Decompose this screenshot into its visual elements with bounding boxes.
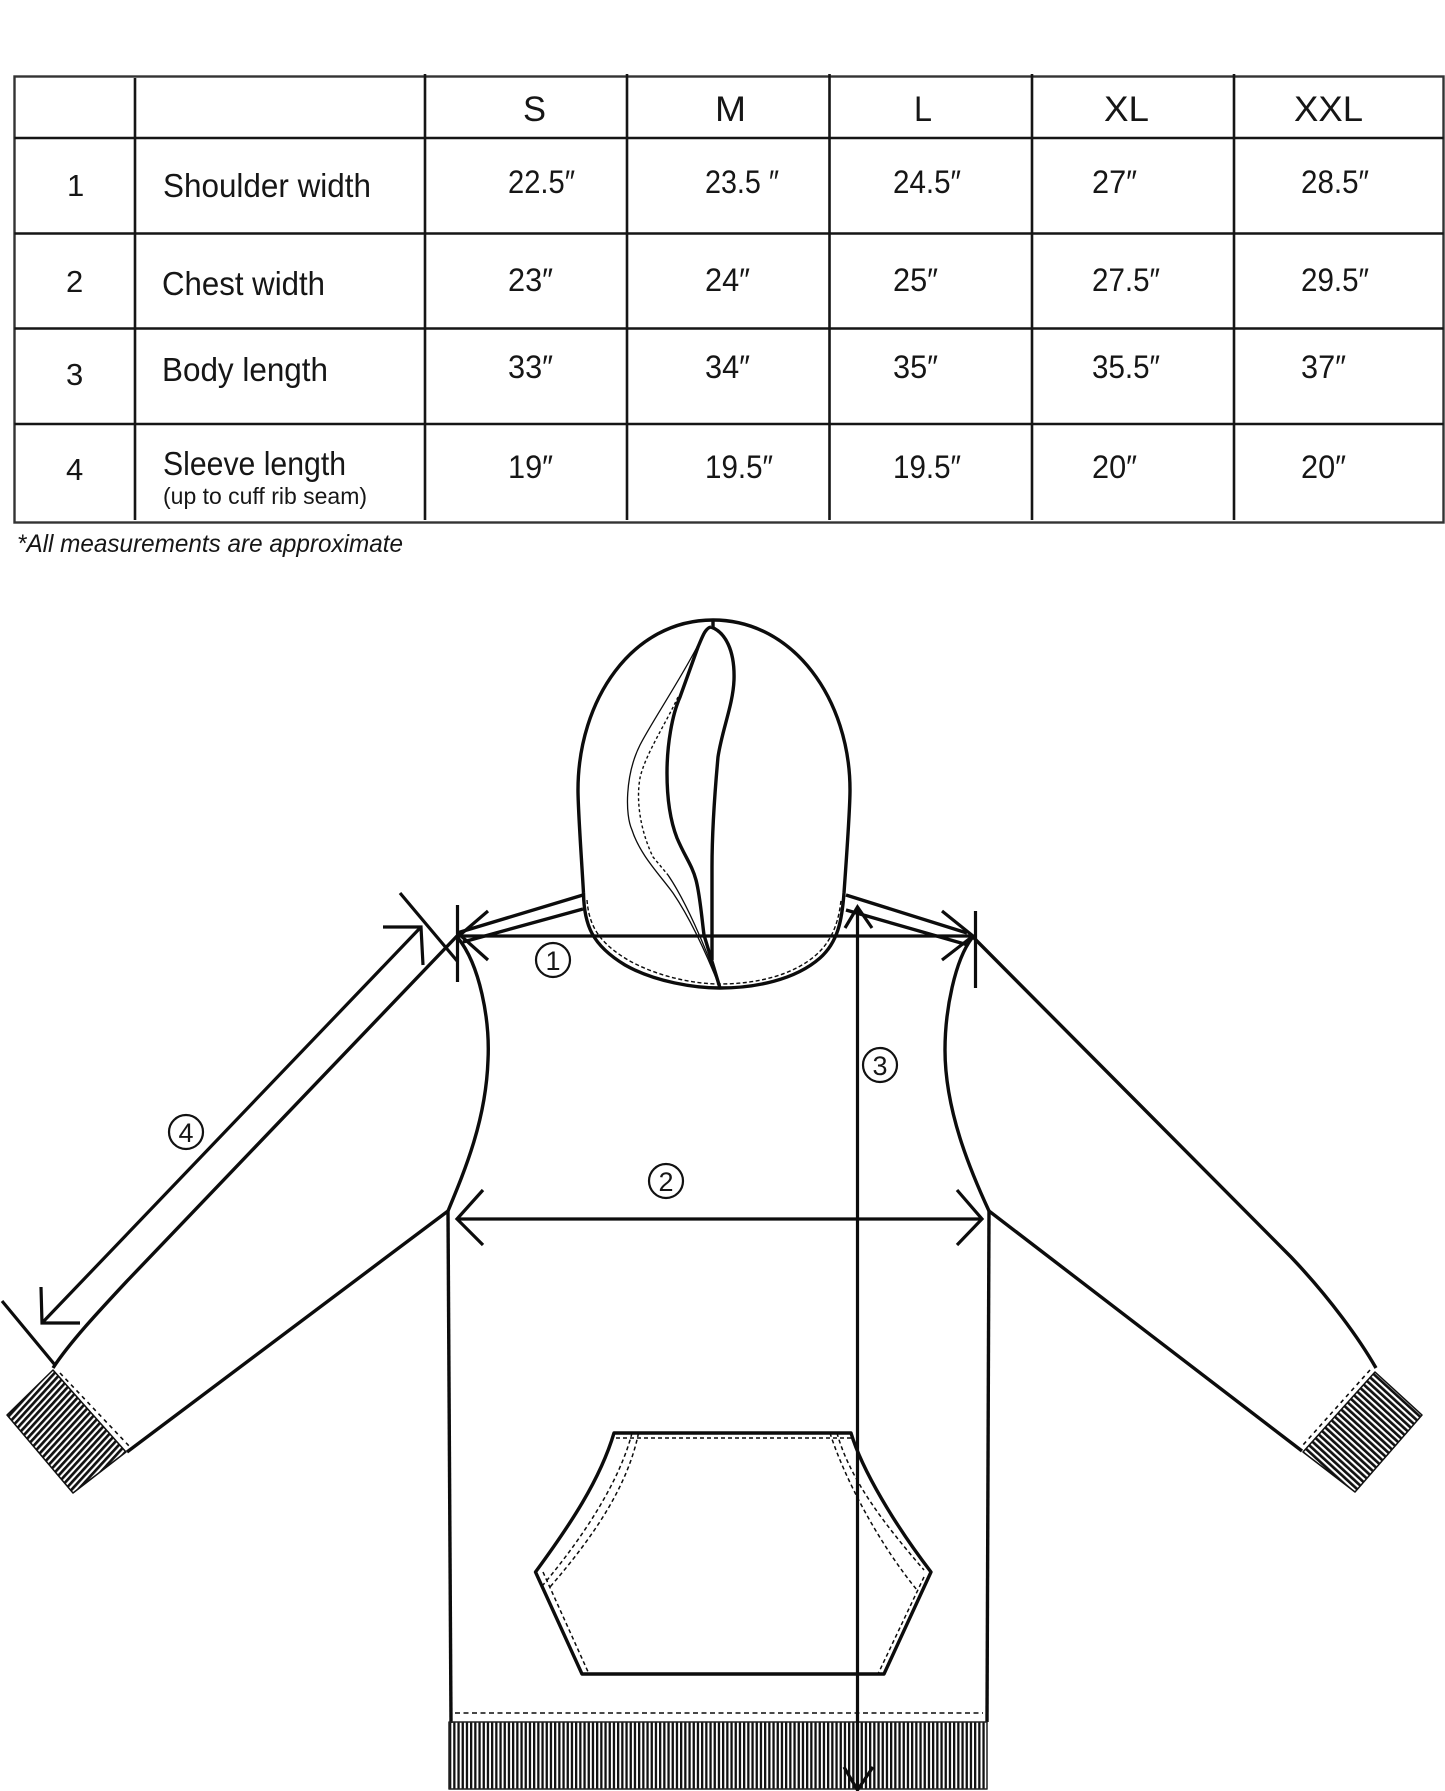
row 4: sleeve length: 19″	[508, 449, 553, 485]
shoulder yokes	[457, 895, 968, 945]
body sides	[448, 1211, 989, 1723]
row 3: body length: 3	[66, 357, 83, 392]
row 1: shoulder width: 24.5″	[893, 164, 961, 200]
left sleeve	[53, 936, 457, 1452]
marker 4: 4	[178, 1118, 194, 1148]
row 4: sleeve length: 20″	[1301, 449, 1346, 485]
row 2: chest width: 25″	[893, 262, 938, 298]
header row: sizes: L	[914, 90, 932, 129]
row 4: sleeve length: (up to cuff rib seam)	[163, 483, 367, 509]
marker 3	[863, 1048, 897, 1082]
row 4: sleeve length: 19.5″	[893, 449, 961, 485]
right cuff ribbing	[1303, 1372, 1422, 1492]
row 1: shoulder width	[67, 164, 1369, 204]
arrow 3: body length	[844, 907, 873, 1790]
arrow 2: chest width	[457, 1190, 982, 1245]
left cuff ribbing	[7, 1370, 126, 1493]
row 3: body length: 35.5″	[1092, 349, 1160, 385]
hood	[578, 620, 850, 988]
header row: sizes: XL	[1104, 90, 1149, 129]
row 4: sleeve length: 4	[66, 452, 83, 487]
row 2: chest width: 23″	[508, 262, 553, 298]
row 1: shoulder width: 22.5″	[508, 164, 575, 200]
arrow 4: sleeve length	[2, 893, 458, 1365]
arrow 1: shoulder width	[458, 905, 976, 988]
row 1: shoulder width: 1	[67, 168, 84, 203]
row 1: shoulder width: 28.5″	[1301, 164, 1369, 200]
row 4: sleeve length: Sleeve length	[163, 445, 346, 482]
marker 2	[649, 1164, 683, 1198]
row 4: sleeve length: 20″	[1092, 449, 1137, 485]
header row: sizes: XXL	[1294, 90, 1363, 129]
row 4: sleeve length	[66, 445, 1346, 509]
row 2: chest width: 27.5″	[1092, 262, 1160, 298]
row 1: shoulder width: Shoulder width	[163, 167, 371, 204]
row 1: shoulder width: 23.5 ″	[705, 164, 779, 200]
row 4: sleeve length: 19.5″	[705, 449, 773, 485]
header row: sizes	[523, 90, 1363, 129]
armholes	[448, 938, 989, 1211]
hem ribbing	[449, 1722, 987, 1789]
row 2: chest width: Chest width	[162, 265, 325, 302]
measurement arrows	[2, 893, 982, 1790]
row 1: shoulder width: 27″	[1092, 164, 1137, 200]
right sleeve	[972, 936, 1376, 1451]
marker 2: 2	[658, 1167, 674, 1197]
row 3: body length: 33″	[508, 349, 553, 385]
size table	[14, 74, 1444, 522]
row 3: body length: 35″	[893, 349, 938, 385]
marker 4	[169, 1115, 203, 1149]
hoodie technical drawing	[7, 620, 1422, 1789]
row 3: body length: Body length	[162, 351, 328, 388]
header row: sizes: M	[715, 90, 746, 129]
row 3: body length: 37″	[1301, 349, 1346, 385]
table grid	[14, 74, 1444, 522]
marker 1	[536, 943, 570, 977]
footnote: *All measurements are approximate	[17, 530, 403, 558]
hem stitching	[455, 1712, 983, 1714]
kangaroo pocket	[536, 1433, 931, 1674]
row 3: body length	[66, 349, 1346, 392]
marker 1: 1	[545, 946, 561, 976]
marker 3: 3	[872, 1051, 888, 1081]
row 2: chest width: 2	[66, 264, 83, 299]
row 2: chest width: 24″	[705, 262, 750, 298]
row 3: body length: 34″	[705, 349, 750, 385]
row 2: chest width	[66, 262, 1369, 302]
row 2: chest width: 29.5″	[1301, 262, 1369, 298]
header row: sizes: S	[523, 90, 546, 129]
